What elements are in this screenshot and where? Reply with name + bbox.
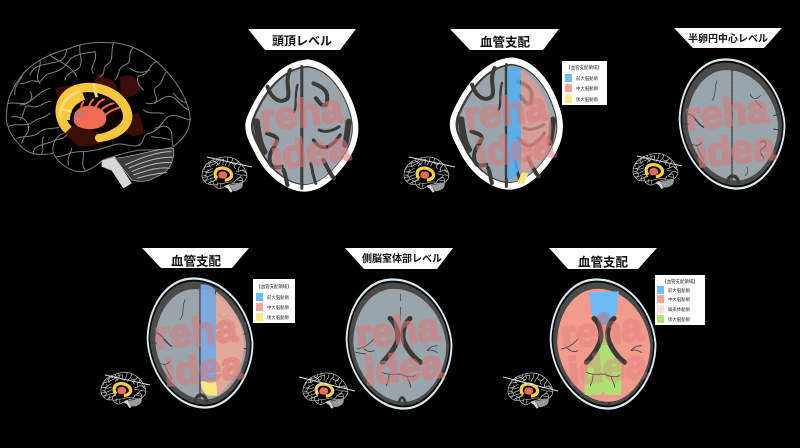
brain scan: vertex level: idea bbox=[268, 124, 353, 179]
icon: small brain with slice line bbox=[633, 154, 682, 189]
brain scan with vascular overlay: reha bbox=[558, 305, 646, 357]
heading banner: vascular territory bbox=[142, 248, 249, 268]
legend: vascular territory: 前大脳動脈 bbox=[668, 287, 691, 294]
panel: vertex level bbox=[202, 29, 358, 193]
heading banner: vascular territory bbox=[549, 248, 657, 270]
brain scan: lateral ventricle body bbox=[346, 278, 452, 410]
legend: vascular territory: 後大脳動脈 bbox=[668, 316, 691, 323]
panel: lateral ventricle body level bbox=[299, 248, 453, 410]
heading banner: vascular territory: 血管支配 bbox=[480, 34, 530, 50]
icon: small brain with slice line bbox=[404, 157, 455, 193]
brain scan: centrum semiovale: idea bbox=[694, 124, 778, 176]
icon: small brain with slice line bbox=[101, 373, 150, 408]
brain scan: vertex level bbox=[245, 59, 358, 192]
heading banner: vertex level bbox=[248, 29, 356, 50]
brain scan with vascular overlay: idea bbox=[566, 342, 650, 394]
brain scan: centrum semiovale bbox=[679, 58, 785, 190]
legend: vascular territory: 中大脳動脈 bbox=[668, 296, 691, 303]
legend: vascular territory: 前大脳動脈 bbox=[576, 75, 599, 82]
legend: vascular territory: 後大脳動脈 bbox=[576, 96, 599, 103]
legend: vascular territory bbox=[562, 61, 607, 105]
heading banner: vascular territory bbox=[450, 29, 559, 50]
brain scan: lateral ventricle body: idea bbox=[362, 342, 446, 394]
icon: small brain with slice line bbox=[503, 373, 558, 409]
panel: vascular territory at lateral ventricle body bbox=[503, 248, 705, 410]
heading banner: vertex level: 頭頂レベル bbox=[272, 34, 332, 48]
legend: vascular territory: 中大脳動脈 bbox=[576, 85, 599, 92]
legend: vascular territory: 前大脳動脈 bbox=[267, 294, 290, 301]
icon: small brain with slice line bbox=[202, 157, 252, 193]
heading banner: centrum semiovale level: 半卵円中心レベル bbox=[688, 32, 768, 45]
brain scan with vascular overlay bbox=[550, 278, 656, 410]
illustration: lateral brain bbox=[6, 43, 191, 188]
legend: vascular territory: 【血管支配領域】 bbox=[566, 64, 602, 71]
brain scan with vascular overlay: reha bbox=[461, 84, 551, 139]
legend: vascular territory bbox=[253, 279, 295, 323]
brain scan: lateral ventricle body: reha bbox=[354, 305, 442, 357]
panel: vascular territory at centrum semiovale bbox=[101, 248, 295, 409]
legend: vascular territory: 後大脳動脈 bbox=[267, 314, 290, 321]
legend: vascular territory: 【血管支配領域】 bbox=[662, 278, 698, 285]
icon: small brain with slice line bbox=[299, 373, 355, 409]
legend: vascular territory bbox=[655, 275, 705, 325]
brain scan: vertex level: reha bbox=[257, 86, 346, 141]
legend: vascular territory: 中大脳動脈 bbox=[267, 304, 290, 311]
brain scan: centrum semiovale: reha bbox=[683, 87, 772, 139]
panel: vascular territory at vertex level bbox=[404, 29, 607, 193]
heading banner: vascular territory: 血管支配 bbox=[578, 254, 628, 270]
legend: vascular territory: 【血管支配領域】 bbox=[256, 283, 292, 290]
panel: centrum semiovale level bbox=[633, 28, 785, 190]
brain scan with vascular overlay: idea bbox=[473, 122, 558, 176]
brain scan with vascular overlay: idea bbox=[162, 343, 246, 395]
heading banner: centrum semiovale level bbox=[674, 28, 782, 48]
heading banner: vascular territory: 血管支配 bbox=[171, 254, 221, 268]
brain scan with vascular overlay bbox=[147, 277, 253, 409]
heading banner: lateral ventricle body level: 側脳室体部レベル bbox=[362, 252, 442, 265]
brain scan with vascular overlay bbox=[450, 57, 563, 190]
brain scan with vascular overlay: reha bbox=[152, 306, 240, 358]
legend: vascular territory: 線条体動脈 bbox=[668, 306, 691, 313]
heading banner: lateral ventricle body level bbox=[345, 248, 453, 269]
